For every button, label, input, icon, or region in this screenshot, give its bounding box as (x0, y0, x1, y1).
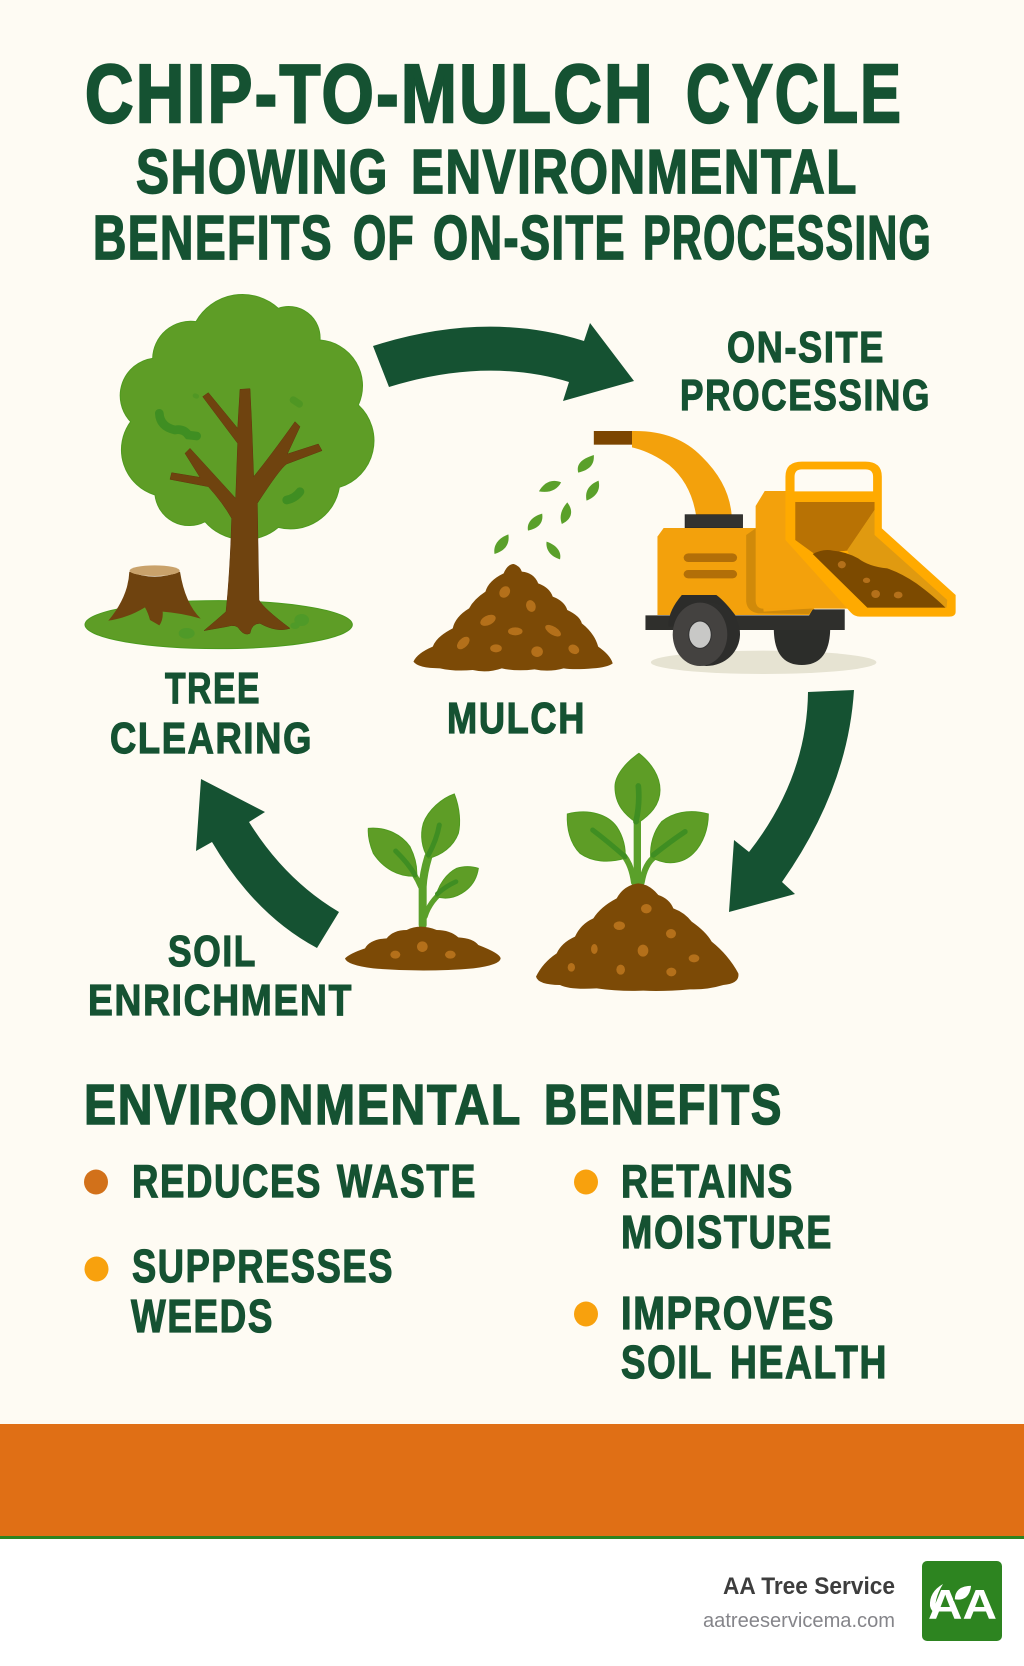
vents (684, 553, 737, 562)
chute tip (594, 431, 632, 445)
website: aatreeservicema.com (703, 1609, 895, 1632)
hopper frame (785, 462, 956, 617)
logo: AA (928, 1581, 997, 1628)
shadow (651, 651, 876, 674)
hopper chips (838, 561, 903, 598)
stump (108, 572, 201, 625)
subtitle line 1: ENVIRONMENTAL (411, 138, 858, 207)
subtitle line 1: SHOWING (136, 138, 389, 207)
subtitle line 2: ON-SITE (433, 204, 626, 273)
soil (345, 927, 501, 970)
label: tree clearing: CLEARING (110, 714, 313, 763)
hopper inner back (795, 502, 875, 554)
title (85, 47, 932, 273)
title: CYCLE (686, 47, 903, 140)
stems (623, 820, 655, 885)
stump top (130, 565, 180, 576)
tree crown (120, 294, 374, 540)
rear wheel (774, 630, 830, 665)
footer (0, 1536, 1024, 1666)
ground shading (179, 614, 309, 639)
arrow: processing to new growth (729, 690, 854, 912)
benefit: improves soil health: SOIL (621, 1336, 713, 1388)
icon: large sprout on mulch (536, 753, 738, 991)
label: mulch: MULCH (447, 694, 586, 743)
title: CHIP-TO-MULCH (85, 47, 655, 140)
label: on-site processing: ON-SITE (727, 323, 885, 372)
label: soil enrichment: ENRICHMENT (88, 976, 353, 1025)
benefit: suppresses weeds: WEEDS (131, 1290, 274, 1342)
benefit: suppresses weeds: SUPPRESSES (132, 1240, 394, 1292)
benefit: suppresses weeds (84, 1240, 394, 1342)
stems (407, 857, 447, 925)
chute collar (685, 515, 743, 528)
label: soil enrichment: SOIL (168, 927, 257, 976)
soil chips (390, 941, 456, 959)
pile chips (455, 585, 581, 657)
heading: environmental benefits: ENVIRONMENTAL (84, 1073, 522, 1137)
benefit: reduces waste (84, 1155, 477, 1207)
front wheel (673, 602, 740, 666)
subtitle line 2: BENEFITS (93, 204, 333, 273)
body front panel (756, 491, 851, 609)
subtitle line 1 (136, 138, 858, 207)
benefit: improves soil health: HEALTH (730, 1336, 888, 1388)
leaves (615, 753, 660, 823)
label: soil enrichment (88, 927, 353, 1025)
leaves (368, 828, 417, 876)
hopper mulch (813, 550, 945, 608)
arrow: tree clearing to processing (373, 323, 634, 401)
logo (922, 1561, 1002, 1641)
trunk and branches (170, 389, 322, 634)
falling leaves (494, 455, 599, 559)
benefit: improves soil health (574, 1287, 888, 1388)
icon: wood chipper machine (594, 431, 956, 674)
ground (85, 601, 352, 649)
orange band (0, 1424, 1024, 1536)
chassis (645, 609, 845, 630)
arrow: soil enrichment to tree clearing (196, 779, 339, 948)
brand name: AA Tree Service (723, 1573, 895, 1600)
icon: mulch pile and chips (413, 455, 613, 671)
crown shading (159, 396, 300, 500)
veins (636, 786, 639, 822)
pile (413, 564, 613, 671)
wheel arch (668, 595, 736, 627)
mound (536, 883, 738, 991)
benefit: retains moisture: MOISTURE (621, 1206, 833, 1258)
icon: small seedling on soil (345, 794, 501, 970)
subtitle line 2: OF (353, 204, 415, 273)
body shade (746, 528, 813, 614)
chute (632, 431, 732, 515)
benefit: improves soil health: IMPROVES (621, 1287, 835, 1339)
label: on-site processing (680, 323, 931, 420)
machine body (657, 528, 815, 615)
heading: environmental benefits: BENEFITS (544, 1073, 783, 1137)
icon: tree with stump on grass (85, 294, 374, 649)
benefit: reduces waste: REDUCES (132, 1155, 322, 1207)
benefit: retains moisture: RETAINS (621, 1155, 794, 1207)
benefit: reduces waste: WASTE (337, 1155, 477, 1207)
mound chips (568, 904, 699, 976)
label: on-site processing: PROCESSING (680, 371, 931, 420)
subtitle line 2 (93, 204, 932, 273)
hopper inner side (847, 510, 947, 608)
benefit: retains moisture (574, 1155, 833, 1258)
label: tree clearing (110, 664, 313, 763)
veins (396, 851, 415, 875)
label: tree clearing: TREE (165, 664, 261, 713)
